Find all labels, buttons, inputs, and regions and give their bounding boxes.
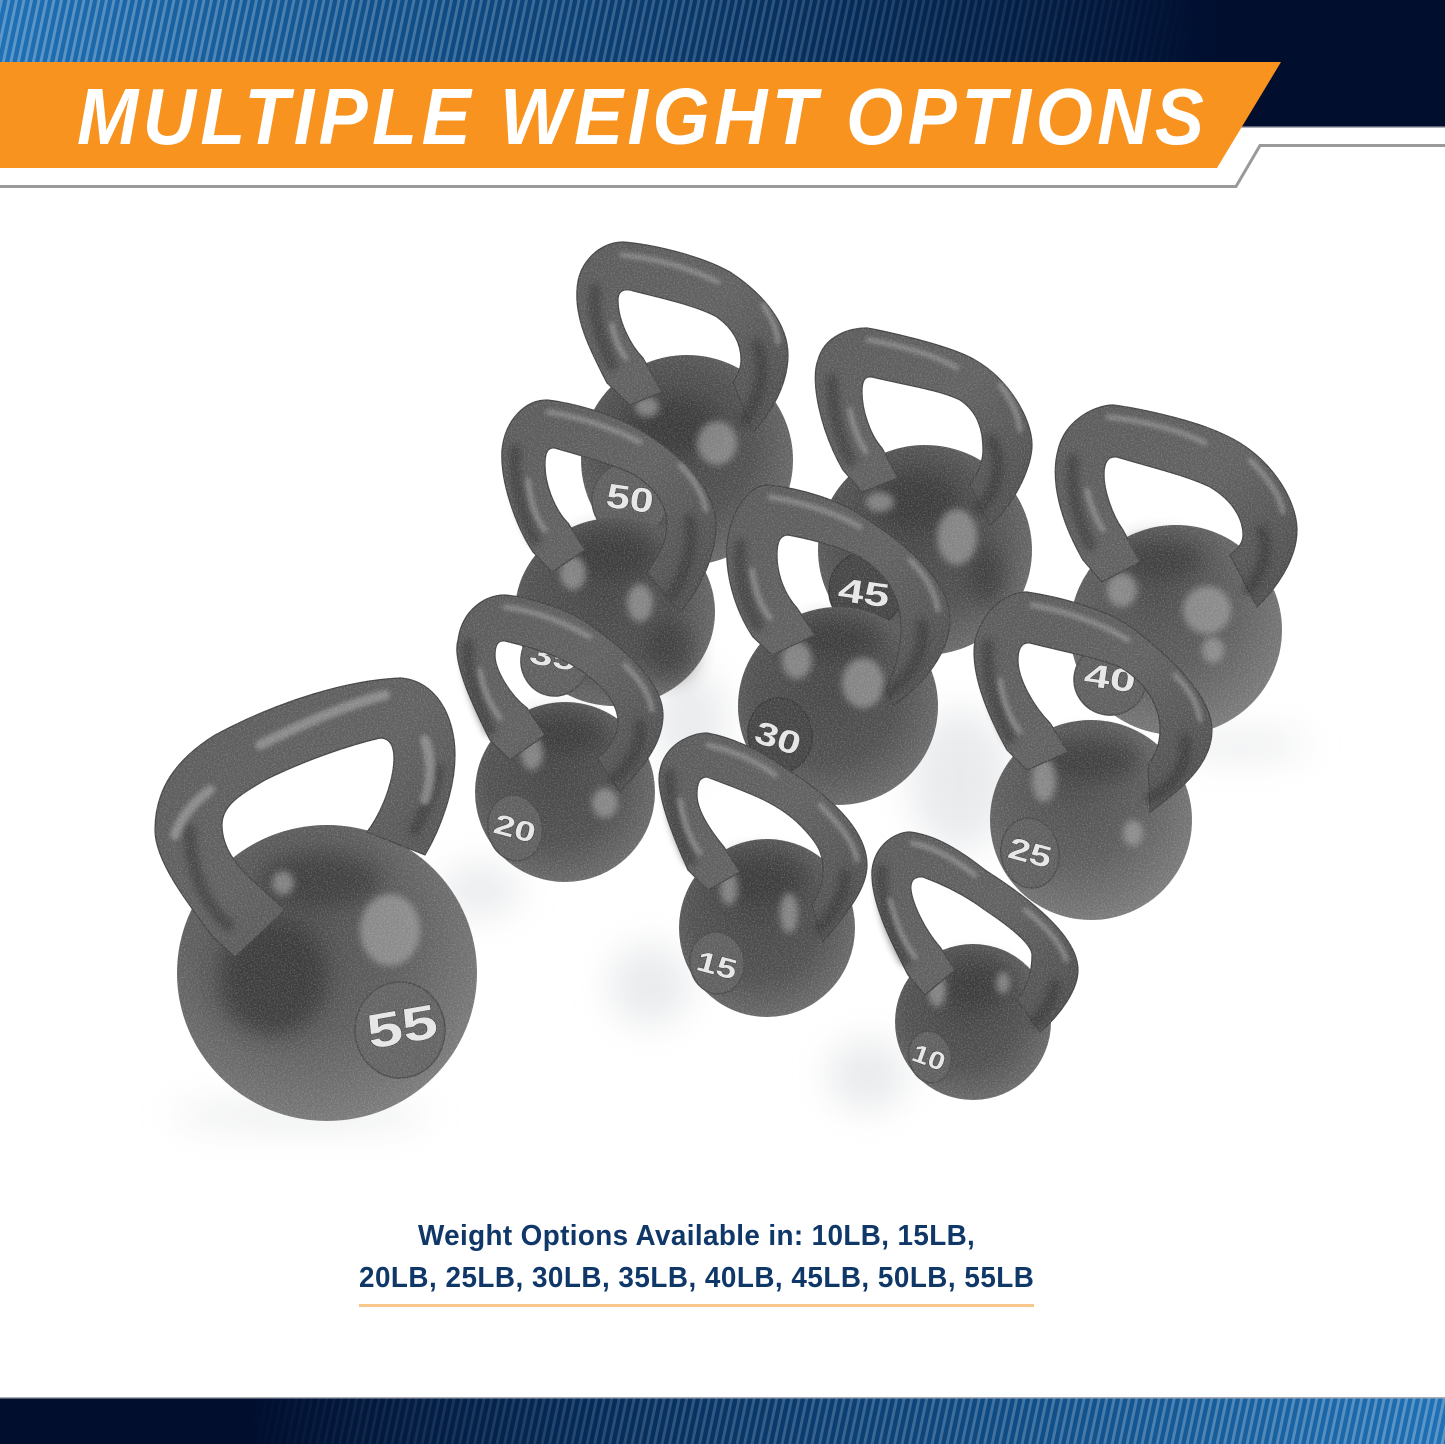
- caption underline: [359, 1304, 1034, 1307]
- kettlebell: 10 lb: 10: [908, 1038, 949, 1076]
- kettlebell: 15 lb: [659, 733, 867, 1017]
- kettlebell: 45 lb: [815, 328, 1032, 655]
- kettlebell: 10 lb: [872, 832, 1078, 1100]
- kettlebell: 40 lb: 40: [1082, 657, 1138, 700]
- caption: weight options: [359, 1219, 1034, 1294]
- caption: weight options: Weight Options Available in: 10LB, 15LB,: [418, 1219, 975, 1252]
- kettlebell: 20 lb: [457, 595, 663, 882]
- kettlebell: 50 lb: 50: [604, 477, 656, 521]
- title ribbon: [0, 62, 1281, 168]
- kettlebell: 30 lb: [727, 485, 950, 805]
- title: MULTIPLE WEIGHT OPTIONS: [77, 72, 1204, 162]
- kettlebell: 30 lb: 30: [750, 713, 806, 762]
- kettlebells group: [155, 242, 1297, 1121]
- bottom banner: [0, 1397, 1445, 1444]
- kettlebell: 50 lb: [577, 242, 793, 565]
- kettlebell: 55 lb: [155, 678, 477, 1121]
- kettlebell: 40 lb: [1055, 405, 1297, 735]
- kettlebell: 25 lb: [974, 592, 1212, 920]
- kettlebell: 35 lb: [502, 400, 716, 706]
- kettlebell: 25 lb: 25: [1005, 832, 1055, 875]
- top banner background: [0, 0, 1445, 128]
- ribbon outline stroke: [0, 146, 1445, 186]
- kettlebell: 15 lb: 15: [693, 945, 740, 986]
- kettlebell: 45 lb: 45: [836, 571, 892, 615]
- floor shadows: [170, 670, 1310, 1127]
- kettlebell: 35 lb: 35: [527, 636, 579, 677]
- kettlebell: 20 lb: 20: [490, 809, 539, 850]
- kettlebell: 55 lb: 55: [363, 994, 441, 1059]
- caption: weight options: 20LB, 25LB, 30LB, 35LB, 40LB, 45LB, 50LB, 55LB: [359, 1261, 1034, 1294]
